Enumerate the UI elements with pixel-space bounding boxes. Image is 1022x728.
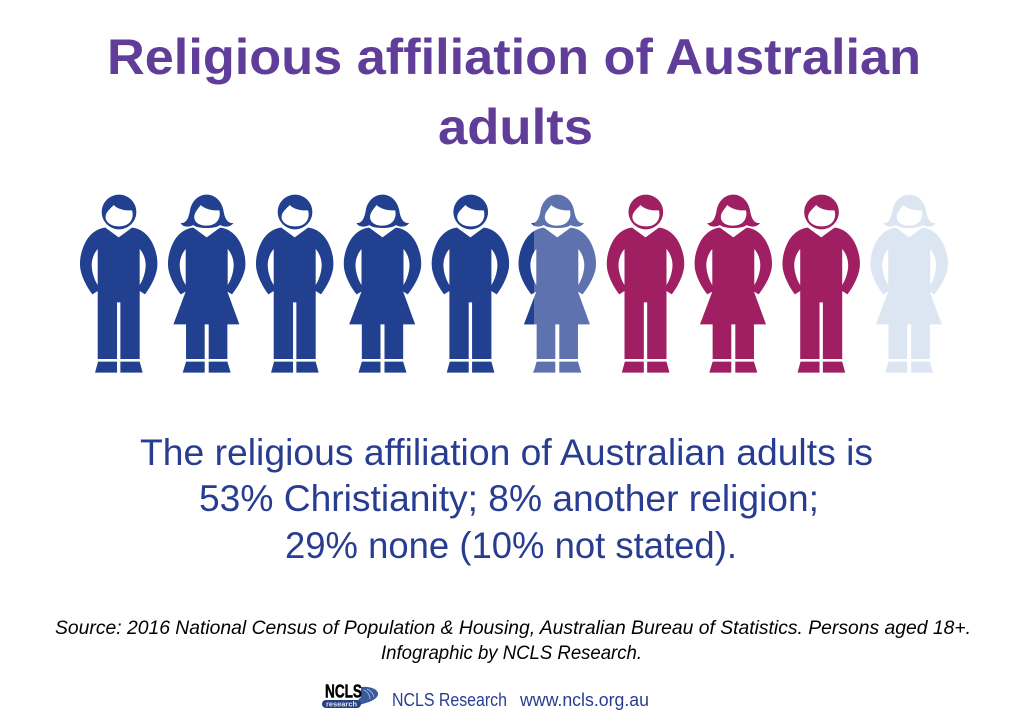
figure 8: none — [695, 195, 772, 373]
title: Religious affiliation of Australian — [107, 29, 921, 85]
source note: Infographic by NCLS Research. — [381, 643, 642, 664]
logo: NCLS research: research — [326, 702, 357, 708]
footer text: www.ncls.org.au — [519, 690, 649, 710]
footer text: NCLS Research — [392, 690, 507, 710]
source note: Source: 2016 National Census of Population & Housing, Australian Bureau of Statistics. Persons aged 18+. — [55, 618, 971, 639]
figure 3: Christianity — [256, 195, 333, 373]
figure 1: Christianity — [80, 195, 157, 373]
footer text — [392, 690, 649, 710]
title: adults — [438, 99, 593, 155]
figure 2: Christianity — [168, 195, 245, 373]
figure 7: none — [607, 195, 684, 373]
title — [107, 29, 921, 155]
figure 10: not stated — [870, 195, 948, 373]
logo: NCLS research — [322, 680, 378, 708]
figure 6: partial Christianity and another religion — [519, 195, 596, 373]
figure 4: Christianity — [344, 195, 421, 373]
summary text: 53% Christianity; 8% another religion; — [199, 478, 819, 519]
summary text — [140, 432, 873, 566]
logo: NCLS research: NCLS — [325, 680, 362, 702]
summary text: The religious affiliation of Australian adults is — [140, 432, 873, 473]
figure 9: none — [782, 195, 860, 373]
source note — [55, 618, 971, 664]
pictogram row: ten people — [80, 195, 948, 373]
summary text: 29% none (10% not stated). — [285, 525, 737, 566]
figure 5: Christianity — [432, 195, 509, 373]
